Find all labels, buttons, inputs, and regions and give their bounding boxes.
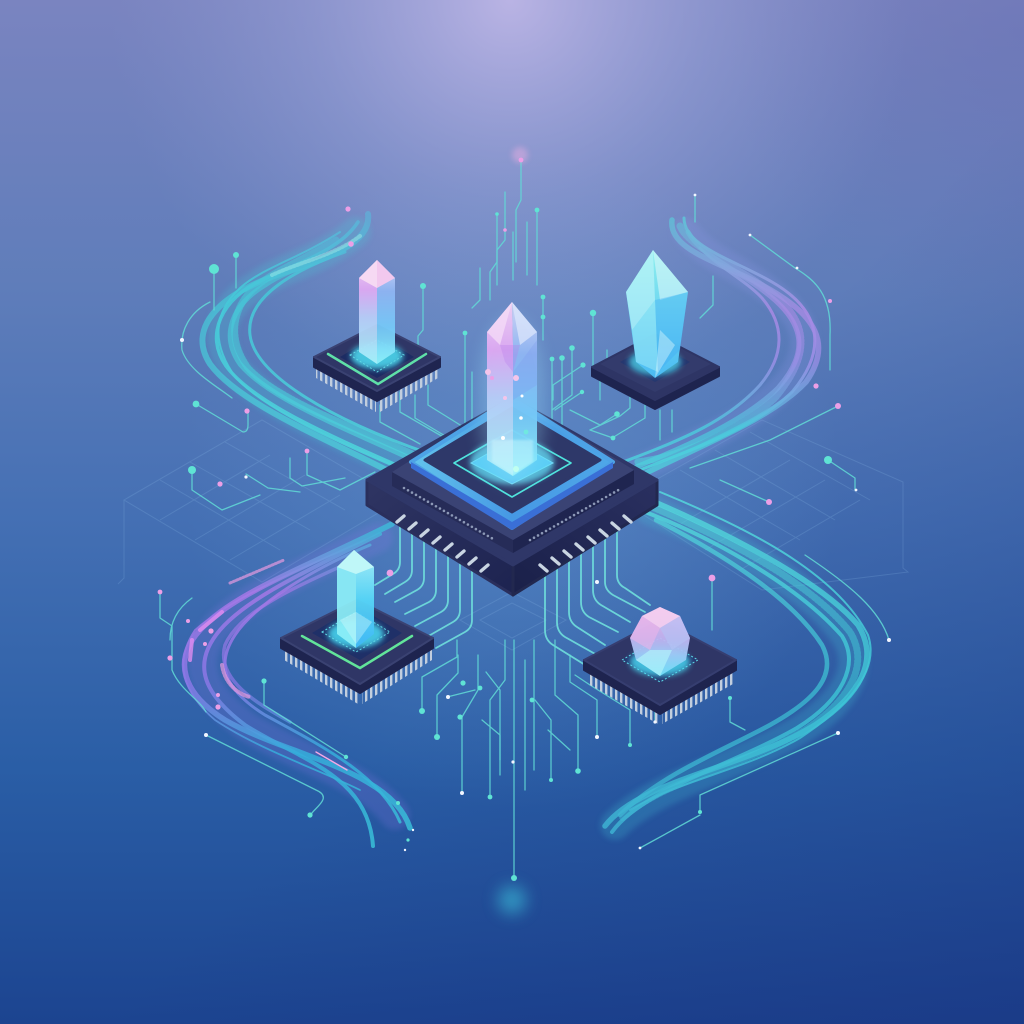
chip pins right — [540, 516, 631, 571]
faint background circuit, right — [620, 420, 908, 590]
central crystal — [478, 302, 546, 484]
central chip — [367, 396, 657, 595]
gem: round crystal — [630, 607, 690, 676]
node dots: white — [180, 194, 891, 851]
crystal facets — [487, 302, 537, 475]
socket dots — [404, 488, 622, 540]
base right side — [513, 480, 657, 595]
faint circuit under chip — [460, 592, 566, 650]
base left side — [367, 480, 513, 595]
central glow beacons — [498, 147, 528, 914]
crystal left face — [487, 302, 513, 476]
crystal sparkles — [485, 369, 528, 472]
chip pins left — [397, 516, 488, 571]
crystal: top right — [626, 250, 688, 378]
crystal: bottom left — [337, 550, 374, 648]
ribbon: bottom right — [605, 492, 871, 832]
circuit traces: from central chip pins — [375, 522, 650, 668]
crystal right face — [512, 302, 537, 476]
blue rim — [411, 398, 613, 530]
crystal: top left — [359, 260, 395, 364]
crystal base glow — [471, 440, 553, 484]
base top face — [367, 398, 657, 565]
circuit traces: top lines and connections — [160, 160, 889, 848]
chip: top left — [314, 325, 440, 412]
node dots: pink — [158, 158, 841, 710]
ribbon: top right — [612, 218, 819, 482]
second tier — [392, 396, 634, 553]
chip: bottom right — [584, 620, 736, 724]
chip: bottom left — [281, 600, 433, 704]
circuit traces: lower cluster — [422, 640, 745, 878]
ribbon glow — [202, 232, 854, 825]
faint background circuit, left — [118, 420, 400, 584]
ribbon: bottom left — [183, 524, 410, 846]
ribbon: top left — [202, 214, 436, 478]
node dots: teal — [188, 208, 832, 881]
chip: top right — [592, 334, 719, 409]
inner dark panel — [425, 408, 600, 512]
teal outline — [454, 430, 571, 497]
